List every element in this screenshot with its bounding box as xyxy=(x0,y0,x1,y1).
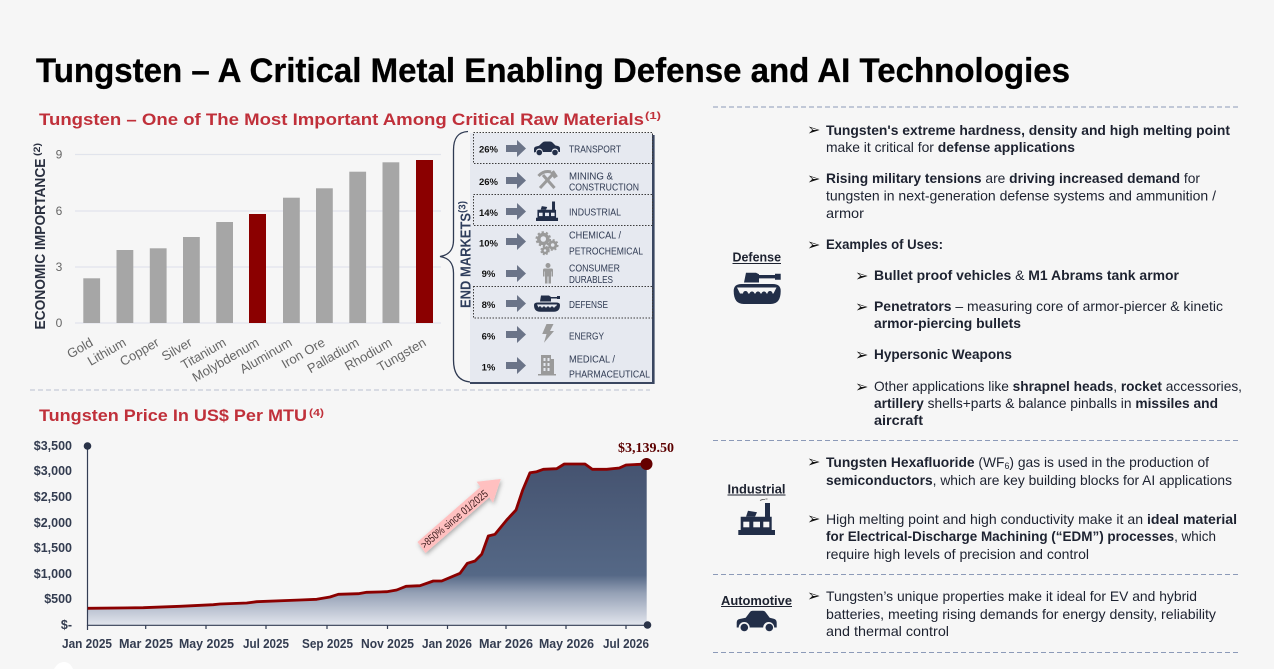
bullets: ➢ xyxy=(855,297,868,316)
labels: TRANSPORT xyxy=(569,144,621,155)
labels: CONSTRUCTION xyxy=(569,182,639,193)
icon: gears xyxy=(536,232,558,254)
industrial text: for Electrical-Discharge Machining (“EDM”) processes, which xyxy=(826,528,1216,544)
bullets: ➢ xyxy=(855,266,868,285)
bullets xyxy=(807,120,868,396)
category labels: Gold xyxy=(64,335,96,361)
bar chart: economic importance xyxy=(32,143,441,385)
panel: defense xyxy=(732,120,1242,428)
y axis labels xyxy=(56,148,63,330)
bullets: ➢ xyxy=(807,235,820,254)
y axis title: (2) xyxy=(32,143,43,156)
defense text: artillery shells+parts & balance pinballs in missiles and xyxy=(874,395,1218,411)
labels: CHEMICAL / xyxy=(569,230,621,241)
area chart: tungsten price xyxy=(34,439,674,651)
automotive text: batteries, meeting rising demands for energy density, reliability xyxy=(826,606,1216,622)
labels: INDUSTRIAL xyxy=(569,207,621,218)
brace xyxy=(440,132,470,382)
dividers xyxy=(713,107,1238,652)
percentages: 26% xyxy=(479,177,499,188)
industrial text: 6 xyxy=(1004,461,1009,471)
heading: critical raw materials: Tungsten – One of The Most Important Among Critical Raw Materials xyxy=(39,110,644,129)
y labels: $- xyxy=(61,618,72,632)
defense text: aircraft xyxy=(874,412,923,428)
percentages xyxy=(479,144,499,374)
labels: PETROCHEMICAL xyxy=(569,246,643,257)
automotive text: Tungsten’s unique properties make it ideal for EV and hybrid xyxy=(826,588,1197,604)
y labels: $500 xyxy=(44,592,72,606)
defense text: armor-piercing bullets xyxy=(874,315,1021,331)
defense text: make it critical for defense applications xyxy=(826,139,1075,155)
icon: factory xyxy=(738,499,775,535)
y labels: $2,000 xyxy=(34,516,72,530)
labels: DURABLES xyxy=(569,275,613,286)
icon: tank xyxy=(734,273,781,304)
bullets: ➢ xyxy=(807,169,820,188)
labels: MEDICAL / xyxy=(569,354,615,365)
category labels: Silver xyxy=(159,334,195,364)
icon: car xyxy=(737,611,777,631)
title: Tungsten – A Critical Metal Enabling Defense and AI Technologies xyxy=(36,52,1070,90)
automotive text xyxy=(826,588,1216,639)
x labels: Mar 2025 xyxy=(119,637,173,651)
y axis title: ECONOMIC IMPORTANCE xyxy=(33,158,49,330)
defense text: armor xyxy=(826,205,864,221)
bullets: ➢ xyxy=(807,509,820,528)
icon: factory xyxy=(536,202,558,221)
category labels: Palladium xyxy=(305,335,362,376)
arrow: growth callout: >850% since 01/2025 xyxy=(419,488,491,551)
heading: critical raw materials: (1) xyxy=(645,110,661,122)
x labels: Jan 2026 xyxy=(422,637,472,651)
industrial text: High melting point and high conductivity make it an ideal material xyxy=(826,511,1237,527)
labels xyxy=(569,144,650,380)
x labels: Mar 2026 xyxy=(479,637,533,651)
heading: price: Tungsten Price In US$ Per MTU xyxy=(39,406,307,425)
y axis labels: 6 xyxy=(56,204,63,218)
divider xyxy=(30,389,650,391)
defense text: Hypersonic Weapons xyxy=(874,346,1012,362)
icon: tank xyxy=(534,296,560,312)
axes xyxy=(88,446,647,630)
bars xyxy=(83,160,433,323)
x labels: Nov 2025 xyxy=(361,637,414,651)
icon: building xyxy=(538,355,556,376)
industrial text: require high levels of precision and control xyxy=(826,546,1089,562)
icon: lightning xyxy=(542,324,554,343)
automotive heading: Automotive xyxy=(721,593,792,608)
category labels: Molybdenum xyxy=(190,335,262,385)
y labels: $1,000 xyxy=(34,567,72,581)
arrows xyxy=(506,140,526,374)
defense text: Examples of Uses: xyxy=(826,236,943,252)
defense text: Rising military tensions are driving increased demand for xyxy=(826,170,1200,186)
category labels: Rhodium xyxy=(342,335,394,374)
category labels: Tungsten xyxy=(374,335,428,374)
y labels: $3,500 xyxy=(34,439,72,453)
x labels: May 2026 xyxy=(539,637,594,651)
percentages: 8% xyxy=(482,300,496,311)
labels: ENERGY xyxy=(569,331,604,342)
percentages: 1% xyxy=(482,362,496,374)
price line xyxy=(88,464,647,608)
industrial heading: Industrial xyxy=(728,482,786,496)
y axis labels: 9 xyxy=(56,148,63,162)
bullet: ➢ xyxy=(807,586,820,605)
y axis labels: 0 xyxy=(56,316,63,330)
category labels xyxy=(64,334,428,385)
y labels: $3,000 xyxy=(34,464,72,478)
percentages: 26% xyxy=(479,144,499,156)
defense text: Bullet proof vehicles & M1 Abrams tank armor xyxy=(874,267,1180,283)
defense text: Tungsten's extreme hardness, density and high melting point xyxy=(826,122,1230,138)
labels: DEFENSE xyxy=(569,300,608,311)
icon: car xyxy=(534,142,560,155)
industrial text: semiconductors, which are key building blocks for AI applications xyxy=(826,472,1232,488)
defense text xyxy=(826,122,1242,428)
y axis labels: 3 xyxy=(56,260,63,274)
x labels: Sep 2025 xyxy=(302,637,353,651)
defense heading: Defense xyxy=(732,250,781,264)
category labels: Aluminum xyxy=(237,335,294,376)
x labels xyxy=(62,637,649,651)
end markets title: END MARKETS xyxy=(458,213,474,308)
heading: price: (4) xyxy=(309,407,324,419)
panel: end markets xyxy=(458,132,655,384)
labels: MINING & xyxy=(569,171,613,182)
industrial text: Tungsten Hexafluoride (WF xyxy=(826,454,1005,470)
icon: person xyxy=(543,263,553,284)
category labels: Iron Ore xyxy=(279,335,328,371)
category labels: Copper xyxy=(117,334,162,369)
category labels: Titanium xyxy=(178,335,228,372)
percentages: 10% xyxy=(479,238,499,250)
defense text: tungsten in next-generation defense systems and ammunition / xyxy=(826,188,1216,204)
area xyxy=(88,464,647,625)
automotive text: and thermal control xyxy=(826,623,949,639)
value label: $3,139.50 xyxy=(618,440,674,455)
x labels: Jul 2025 xyxy=(243,637,289,651)
industrial text xyxy=(826,454,1237,562)
percentages: 9% xyxy=(482,269,496,280)
bullets: ➢ xyxy=(855,377,868,396)
x labels: Jan 2025 xyxy=(62,637,112,651)
bullets: ➢ xyxy=(807,452,820,471)
y labels: $1,500 xyxy=(34,541,72,555)
end markets title: (3) xyxy=(458,201,468,213)
y labels xyxy=(34,439,72,632)
panel: industrial xyxy=(728,452,1237,562)
defense text: Penetrators – measuring core of armor-piercer & kinetic xyxy=(874,298,1223,314)
labels: CONSUMER xyxy=(569,264,620,275)
category labels: Lithium xyxy=(85,335,128,369)
industrial text: gas is used in the production of xyxy=(1018,454,1212,470)
percentages: 6% xyxy=(482,332,496,342)
bullets: ➢ xyxy=(807,120,820,139)
y labels: $2,500 xyxy=(34,490,72,504)
bullets xyxy=(807,452,820,528)
percentages: 14% xyxy=(479,208,499,219)
x labels: May 2025 xyxy=(179,637,234,651)
bullets: ➢ xyxy=(855,345,868,364)
defense text: Other applications like shrapnel heads, rocket accessories, xyxy=(874,378,1242,394)
industrial text: ) xyxy=(1009,454,1014,470)
panel: automotive xyxy=(721,586,1216,639)
labels: PHARMACEUTICAL xyxy=(569,369,650,380)
x labels: Jul 2026 xyxy=(603,637,649,651)
icon: mining tools xyxy=(538,172,556,188)
